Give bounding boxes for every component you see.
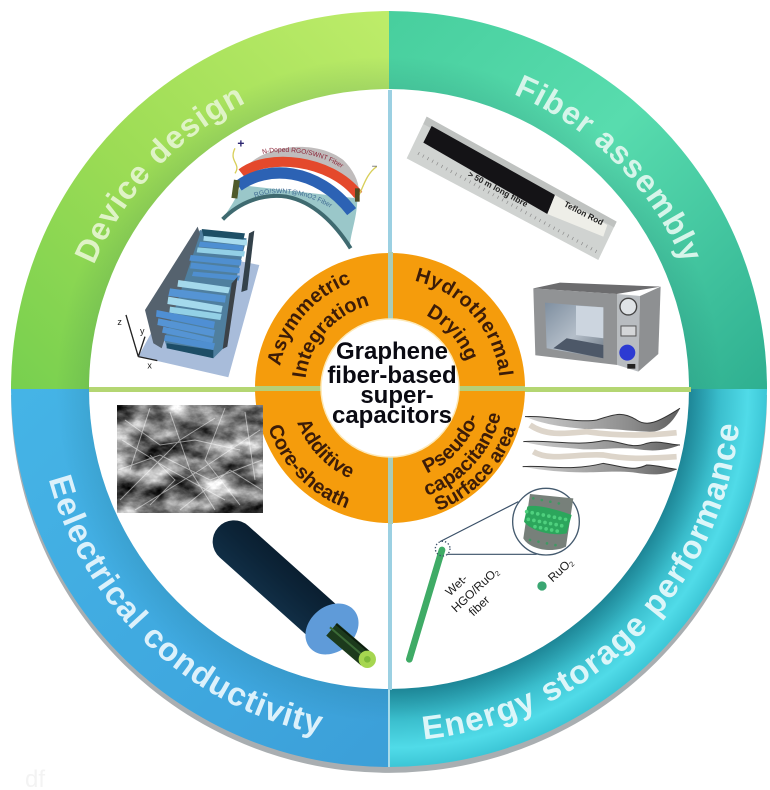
ring segment: device design bbox=[11, 11, 389, 389]
label: Teflon Rod: Teflon Rod bbox=[562, 199, 605, 227]
dividers bbox=[89, 90, 691, 690]
orange inner ring bbox=[255, 252, 525, 524]
label: Wet-HGO/RuO2 fiber: HGO/RuO bbox=[449, 564, 502, 616]
ring label: Fiber assembly: Fiber assembly bbox=[515, 74, 699, 258]
label: Wet-HGO/RuO2 fiber: 2 bbox=[493, 569, 502, 578]
centre title: Graphene bbox=[336, 338, 448, 365]
ring segment: electrical conductivity bbox=[11, 389, 389, 767]
label: Pseudo-: Pseudo- bbox=[422, 415, 475, 473]
ring label: Device design: Device design bbox=[74, 90, 244, 263]
label: Wet-HGO/RuO2 fiber: Wet- bbox=[442, 571, 470, 599]
axis labels: x bbox=[147, 360, 152, 370]
orange ring labels bbox=[268, 268, 516, 510]
label: N-Doped RGO/SWNT Fiber: N-Doped RGO/SWNT Fiber bbox=[262, 147, 344, 168]
centre title: super- bbox=[360, 382, 434, 409]
centre title: capacitors bbox=[332, 402, 452, 429]
illustration: ruler with 50 m fibre on Teflon rod bbox=[407, 117, 617, 260]
ring segment: energy storage performance bbox=[389, 389, 767, 767]
ring label: Electrical conductivity: Eelectrical conductivity bbox=[49, 474, 324, 738]
label: Additive: Additive bbox=[297, 422, 352, 478]
label: RuO2: 2 bbox=[567, 559, 576, 569]
axis labels: y bbox=[140, 326, 145, 336]
illustration: stacked supercapacitor array bbox=[117, 227, 259, 377]
illustration: core-sheath wire bbox=[234, 542, 376, 668]
label: RGO/SWNT@MnO2 Fiber: RGO/SWNT@MnO2 Fiber bbox=[254, 188, 332, 208]
centre title: fiber-based bbox=[327, 362, 457, 389]
label: Integration: Integration bbox=[292, 296, 369, 378]
illustration: SEM micrograph bbox=[117, 405, 263, 513]
RuO2 bead bbox=[537, 581, 547, 591]
label: Wet-HGO/RuO2 fiber: fiber bbox=[466, 593, 492, 619]
illustration: drying oven bbox=[533, 283, 661, 372]
label: RuO2: RuO bbox=[545, 558, 573, 585]
label: Core-sheath: Core-sheath bbox=[270, 425, 348, 508]
illustration: layered graphene sheets bbox=[523, 408, 680, 474]
label: Asymmetric: Asymmetric bbox=[268, 274, 350, 366]
label: > 50 m long fibre: > 50 m long fibre bbox=[466, 169, 530, 209]
label: Surface area: Surface area bbox=[434, 426, 516, 510]
centre title bbox=[327, 338, 457, 429]
axis labels: z bbox=[117, 317, 122, 327]
minus terminal: − bbox=[372, 161, 378, 172]
label: Hydrothermal: Hydrothermal bbox=[416, 268, 514, 376]
illustration: flexible fiber device bbox=[221, 136, 378, 250]
label: Drying: Drying bbox=[427, 304, 476, 361]
plus terminal: + bbox=[237, 136, 244, 150]
ring segment: fiber assembly bbox=[389, 11, 767, 389]
label: capacitance: capacitance bbox=[425, 414, 500, 494]
ring label: Energy storage performance: Energy storage performance bbox=[422, 424, 738, 740]
illustration: HGO/RuO2 fiber with magnified inset bbox=[409, 488, 579, 659]
